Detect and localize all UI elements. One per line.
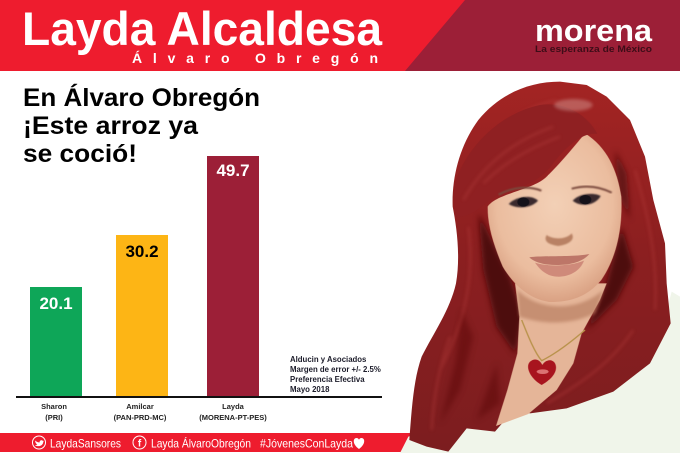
morena logo: morena xyxy=(535,13,653,48)
label: Sharon: (PRI) xyxy=(45,413,63,422)
label: Sharon: Sharon xyxy=(41,402,67,411)
footer hashtag: #JóvenesConLayda xyxy=(260,436,353,450)
source note: Preferencia Efectiva xyxy=(290,375,365,384)
hair shadows xyxy=(440,150,633,423)
bar: Layda 49.7: 49.7 xyxy=(216,161,250,180)
morena logo: La esperanza de México xyxy=(535,44,652,55)
crown shine xyxy=(554,99,593,111)
icon: facebook: f xyxy=(138,438,142,450)
label: Layda xyxy=(199,402,267,422)
source note xyxy=(290,355,381,394)
back hair xyxy=(409,82,671,452)
label: Layda: Layda xyxy=(222,402,245,411)
bar: Layda 49.7 xyxy=(207,156,259,396)
necklace and pendant xyxy=(522,320,585,385)
source note: Alducin y Asociados xyxy=(290,355,367,364)
nose shadow xyxy=(546,233,573,246)
face xyxy=(488,133,622,302)
footer handle twitter: LaydaSansores xyxy=(50,436,121,450)
icon: heart xyxy=(354,438,364,449)
left eye xyxy=(499,188,541,207)
label: Layda: (MORENA-PT-PES) xyxy=(199,413,267,422)
bar: Amilcar 30.2 xyxy=(116,235,168,396)
chest and neck xyxy=(496,283,607,426)
source note: Margen de error +/- 2.5% xyxy=(290,365,381,374)
header title: Layda Alcaldesa xyxy=(22,2,383,55)
header subtitle: Álvaro Obregón xyxy=(132,50,378,66)
icon: facebook xyxy=(133,436,146,450)
bar: Sharon 20.1: 20.1 xyxy=(39,294,73,313)
portrait photo xyxy=(400,82,680,453)
fringe xyxy=(453,104,597,217)
shirt xyxy=(400,292,680,453)
bar: Amilcar 30.2: 30.2 xyxy=(125,242,159,261)
bar: Sharon 20.1 xyxy=(30,287,82,396)
label: Sharon xyxy=(41,402,67,422)
footer bar xyxy=(0,433,420,452)
neck shadow xyxy=(517,290,603,322)
right eye xyxy=(572,187,612,205)
source note: Mayo 2018 xyxy=(290,385,330,394)
headline: En Álvaro Obregón xyxy=(23,83,260,112)
headline: ¡Este arroz ya xyxy=(23,112,199,140)
header banner xyxy=(0,0,680,71)
hair highlights xyxy=(432,100,656,430)
headline: se coció! xyxy=(23,140,137,168)
bar chart xyxy=(16,156,382,422)
icon: twitter xyxy=(32,436,46,449)
label: Amilcar xyxy=(114,402,167,422)
label: Amilcar: Amilcar xyxy=(126,402,154,411)
footer handle facebook: Layda ÁlvaroObregón xyxy=(151,436,251,450)
headline xyxy=(23,83,260,168)
lips xyxy=(529,254,589,277)
fringe strands xyxy=(463,127,560,200)
label: Amilcar: (PAN-PRD-MC) xyxy=(114,413,167,422)
